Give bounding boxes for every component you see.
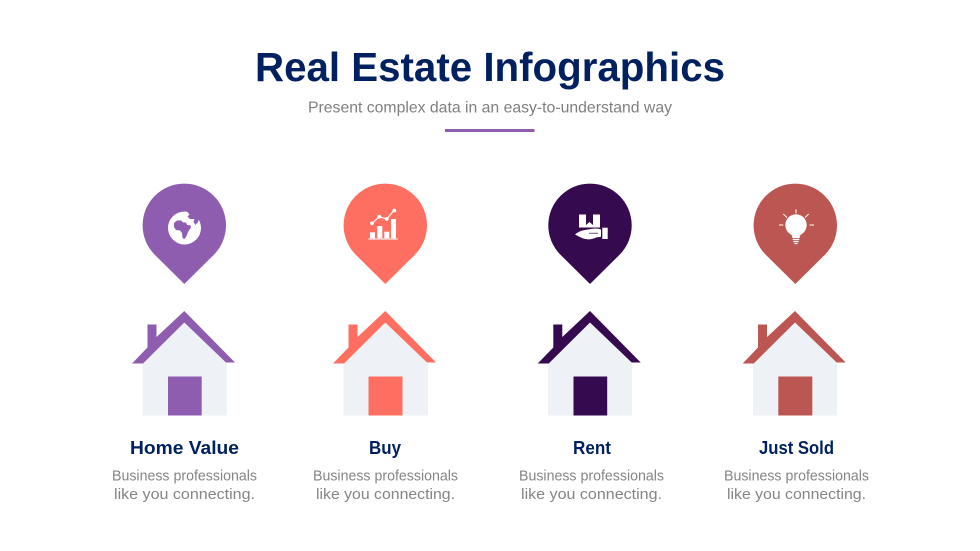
column: home value (112, 184, 257, 503)
description: like you connecting. (727, 487, 866, 503)
description: like you connecting. (114, 487, 255, 503)
house (743, 311, 846, 416)
description (724, 469, 869, 503)
column: rent (519, 184, 664, 503)
description: like you connecting. (521, 487, 662, 503)
heading: buy: Buy (369, 437, 402, 458)
house (333, 311, 436, 416)
pin: hand (548, 184, 632, 284)
description (519, 469, 664, 503)
description: Business professionals (112, 469, 257, 485)
icon: hand holding building (575, 214, 608, 239)
description: Business professionals (724, 469, 869, 485)
house (538, 311, 641, 416)
description: Business professionals (519, 469, 664, 485)
description (112, 469, 257, 503)
heading: home value: Home Value (130, 437, 239, 458)
heading: just sold: Just Sold (759, 437, 834, 458)
description: Business professionals (313, 469, 458, 485)
description: like you connecting. (316, 487, 455, 503)
column: just sold (724, 184, 869, 503)
title: Real Estate Infographics (255, 44, 725, 90)
title underline (445, 129, 534, 132)
icon: globe (168, 212, 201, 244)
pin: chart (344, 184, 427, 284)
house (132, 311, 235, 416)
subtitle: Present complex data in an easy-to-understand way (308, 100, 672, 116)
heading: rent: Rent (573, 437, 611, 458)
pin: globe (143, 184, 226, 284)
icon: light bulb (779, 209, 814, 244)
column: buy (313, 184, 458, 503)
pin: light bulb (754, 184, 837, 284)
description (313, 469, 458, 503)
icon: bar chart (368, 209, 398, 240)
